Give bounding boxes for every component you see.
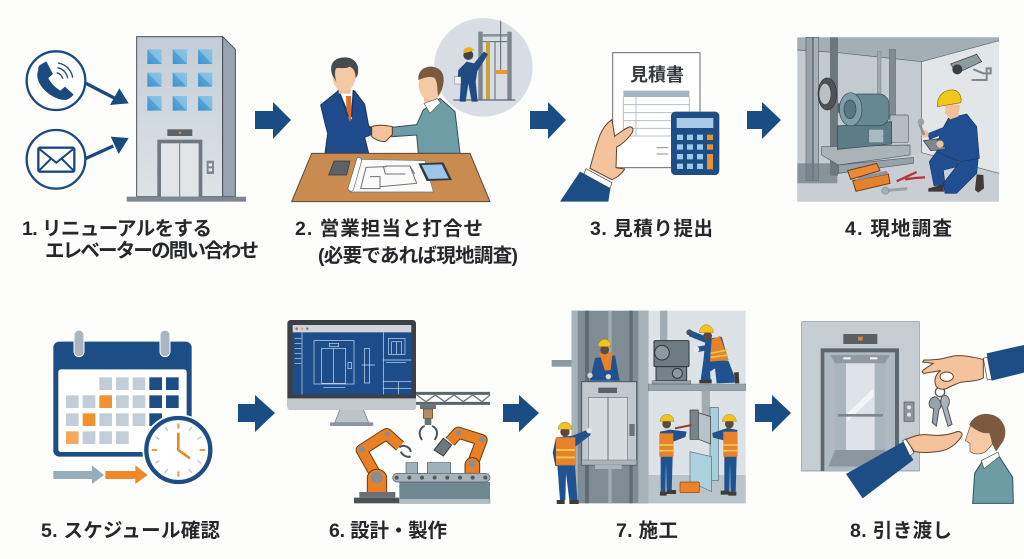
arrow: grey timeline bbox=[53, 465, 104, 484]
lower hand with sleeve bbox=[846, 432, 962, 498]
worker: lower right bbox=[712, 414, 737, 496]
label: step 3: 3. 見積り提出 bbox=[590, 218, 713, 240]
worker: in shaft bbox=[587, 339, 620, 381]
panel: step 8 handover bbox=[802, 322, 1024, 542]
hand and sleeve bbox=[560, 120, 633, 202]
arrow: step 6 to 7 bbox=[503, 395, 539, 432]
icon: clock bbox=[142, 414, 214, 486]
person: customer bbox=[965, 414, 1013, 503]
robot arm right bbox=[434, 430, 485, 473]
security camera bbox=[951, 54, 991, 80]
icon: telephone bbox=[27, 51, 85, 110]
label: step 4: 4. 現地調査 bbox=[845, 218, 952, 240]
arrow: step 2 to 3 bbox=[530, 102, 566, 139]
label: step 7: 7. 施工 bbox=[616, 520, 678, 542]
arrow: phone to building bbox=[86, 83, 129, 105]
label: step 8: 8. 引き渡し bbox=[850, 520, 952, 542]
icon: envelope bbox=[27, 130, 85, 189]
machine bbox=[652, 341, 691, 384]
label: step 2: (必要であれば現地調査) bbox=[318, 245, 518, 267]
arrow: step 3 to 4 bbox=[747, 102, 781, 139]
illustration: machine room bbox=[797, 37, 999, 202]
illustration: construction site bbox=[552, 311, 746, 504]
robot arm left bbox=[358, 431, 411, 493]
label: step 2 bbox=[295, 217, 518, 267]
label: step 1 bbox=[22, 218, 259, 262]
panel: step 2 meeting bbox=[292, 18, 533, 267]
person: sales representative bbox=[321, 57, 371, 153]
worker with clipboard bbox=[918, 90, 984, 193]
worker: lower left bbox=[659, 414, 692, 496]
label: step 1: エレベーターの問い合わせ bbox=[45, 240, 259, 262]
arrow: step 5 to 6 bbox=[238, 395, 275, 432]
illustration: CAD monitor and robots bbox=[287, 320, 490, 503]
label: step 6: 6. 設計・製作 bbox=[329, 519, 447, 542]
handshake bbox=[372, 125, 392, 141]
illustration: meeting and inset site survey bbox=[292, 18, 533, 202]
panel: step 1 inquiry bbox=[22, 37, 259, 262]
person: client bbox=[392, 67, 460, 153]
panel: step 5 schedule bbox=[41, 330, 220, 542]
new elevator bbox=[802, 322, 919, 471]
traction machine bbox=[818, 78, 913, 173]
panels and toolbox bbox=[680, 407, 718, 493]
overhead gripper bbox=[420, 405, 437, 440]
arrow: mail to building bbox=[86, 137, 129, 158]
truss bbox=[416, 393, 490, 403]
monitor with blueprint bbox=[287, 320, 416, 426]
panel: step 4 site survey bbox=[797, 37, 999, 240]
illustration: phone, mail and building bbox=[27, 37, 246, 202]
illustration: elevator and key handover bbox=[802, 322, 1024, 503]
arrow: step 1 to 2 bbox=[255, 102, 291, 139]
illustration: calendar and clock bbox=[53, 330, 214, 486]
arrow: orange timeline bbox=[105, 465, 148, 484]
room background bbox=[797, 37, 999, 202]
worker: left bbox=[553, 422, 592, 504]
icon: keys bbox=[929, 387, 952, 426]
conveyor with parts bbox=[354, 463, 490, 503]
label: step 5: 5. スケジュール確認 bbox=[41, 520, 220, 542]
label: step 1: 1. リニューアルをする bbox=[22, 218, 212, 240]
quotation document: 見積書 bbox=[630, 64, 684, 85]
elevator car bbox=[582, 382, 637, 469]
toolbox and tools bbox=[848, 163, 925, 194]
label: step 2: 2. 営業担当と打合せ bbox=[295, 217, 483, 240]
shaft and rooms bbox=[552, 311, 746, 503]
building with elevator bbox=[127, 37, 246, 202]
panel: step 3 quotation bbox=[560, 53, 719, 240]
calculator bbox=[671, 112, 719, 175]
calendar bbox=[53, 330, 192, 457]
panel: step 6 design and manufacturing bbox=[287, 320, 490, 542]
inset: site survey worker bbox=[434, 18, 533, 117]
upper hand with sleeve bbox=[922, 345, 1024, 389]
worker: on upper floor bbox=[686, 325, 739, 383]
arrow: step 7 to 8 bbox=[755, 395, 791, 432]
illustration: quotation, hand and calculator bbox=[560, 53, 719, 202]
table with documents bbox=[292, 153, 490, 202]
panel: step 7 construction bbox=[552, 311, 746, 542]
quotation document bbox=[613, 53, 700, 168]
